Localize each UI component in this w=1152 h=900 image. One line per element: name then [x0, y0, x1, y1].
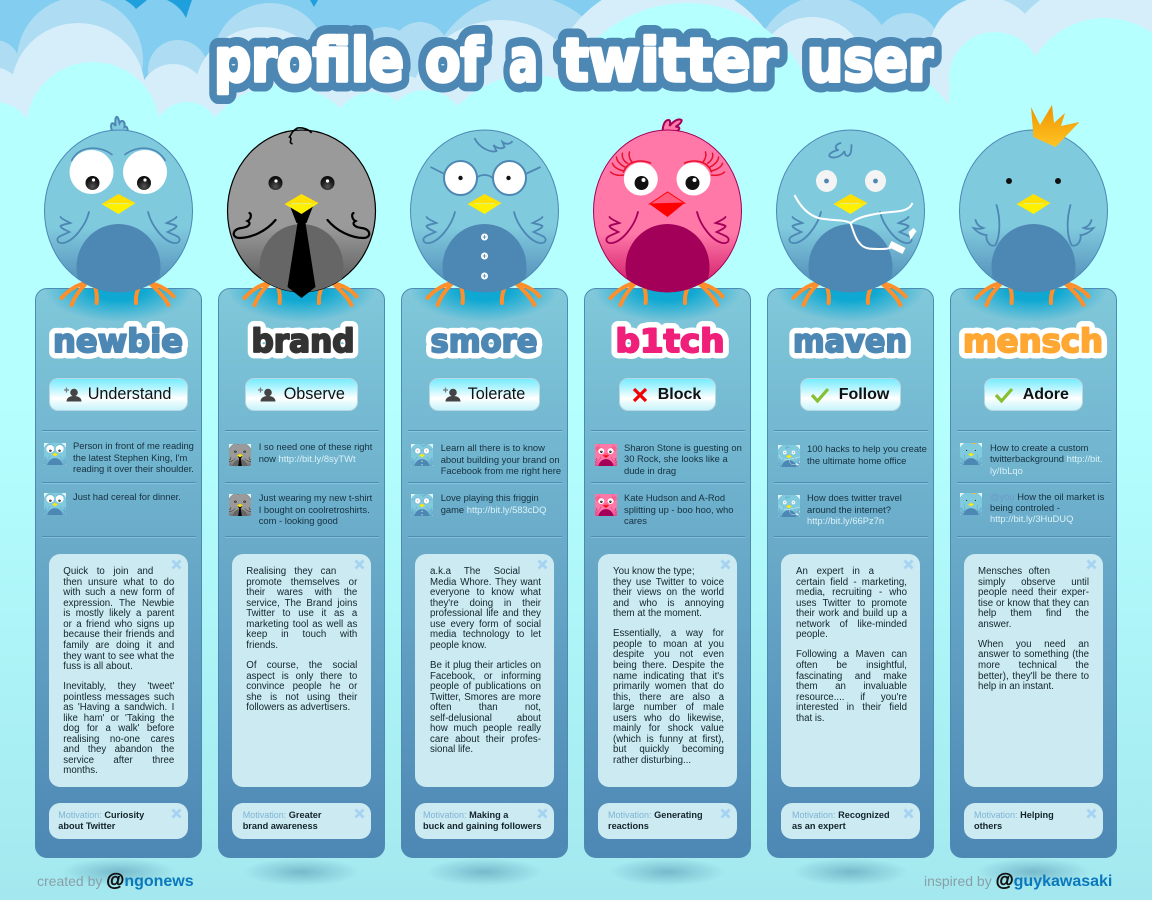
tweet text: I so need one of these right — [259, 441, 372, 452]
description text: media technology to let — [430, 629, 541, 640]
description text: Following a Maven can — [796, 649, 907, 660]
tweet text: around the internet? — [807, 504, 891, 515]
description text — [63, 566, 174, 776]
description text: people know. — [430, 640, 487, 651]
motivation box — [598, 803, 737, 839]
description text: Facebook, or informing — [430, 670, 541, 682]
heading: b1tch: b1tch — [616, 322, 724, 360]
heading: mensch: mensch — [963, 322, 1103, 360]
tweet text: reading it over their shoulder. — [73, 463, 194, 474]
description text: despite you not even — [613, 649, 724, 660]
description text: like ham' or 'Taking the — [63, 713, 174, 724]
description text: with such a new form of — [63, 587, 174, 598]
tweet avatar — [778, 495, 800, 517]
description text: care about their profes- — [430, 734, 541, 745]
description text: Media Whore. They want — [430, 577, 541, 588]
motivation text: reactions — [608, 820, 649, 830]
motivation text — [608, 810, 703, 832]
motivation text: Motivation: Curiosity — [58, 810, 144, 820]
description text: fuss is all about. — [63, 661, 133, 672]
tweet text — [624, 492, 733, 526]
button: observe: Observe — [284, 385, 345, 403]
description text: Of course, the social — [246, 660, 357, 671]
tweet text: splitting up - boo hoo, who — [624, 504, 733, 515]
close icon — [1086, 808, 1096, 818]
tweet avatar — [44, 493, 66, 515]
icon: pink bird — [593, 118, 742, 308]
description text: months. — [63, 765, 98, 776]
description text: interested in their field — [796, 702, 907, 713]
panel background — [584, 288, 751, 858]
description text: often be insightful, — [796, 660, 907, 671]
tweet text: Person in front of me reading — [73, 440, 194, 451]
heading: smore: smore — [430, 322, 538, 360]
description text: they want to see what the — [63, 651, 174, 662]
tweet text: the ultimate home office — [807, 455, 906, 466]
description text: use every form of social — [430, 619, 541, 630]
description text: often than not, — [430, 702, 541, 713]
description text: that is. — [796, 713, 825, 724]
description text: help in an instant. — [978, 681, 1054, 692]
tweet text: Just had cereal for dinner. — [73, 491, 181, 502]
button: follow — [800, 378, 901, 411]
close icon — [354, 560, 364, 570]
description text: this, there are also a — [613, 692, 724, 703]
description text: fascinating and make — [796, 670, 907, 682]
description text: Mensches often — [978, 566, 1050, 577]
panel shadow — [61, 858, 176, 886]
panel background — [401, 288, 568, 858]
button: observe — [245, 378, 358, 411]
panel: mensch — [950, 100, 1117, 885]
description text: them an invaluable — [796, 681, 907, 692]
tweet text: Facebook from me right here — [441, 465, 561, 476]
motivation box — [964, 803, 1103, 839]
description text: friends. — [246, 640, 278, 651]
description box — [781, 554, 920, 787]
description text: help them find the — [978, 608, 1089, 619]
description text: everyone to know what — [430, 587, 541, 598]
description text: their work and build up a — [796, 608, 907, 619]
description text: resource.... if you're — [796, 692, 907, 703]
motivation text — [243, 810, 322, 830]
motivation text: buck and gaining followers — [423, 820, 541, 830]
tweet avatar — [960, 493, 982, 515]
title: user — [807, 26, 933, 96]
motivation text: as an expert — [792, 820, 846, 830]
title: twitter — [562, 26, 778, 96]
button: understand — [49, 378, 188, 411]
panel shadow — [427, 858, 542, 886]
heading: newbie: newbie — [53, 322, 183, 360]
description box — [415, 554, 554, 787]
tweet text: http://bit.ly/66Pz7n — [807, 515, 884, 526]
panel shadow — [244, 858, 359, 886]
tweet avatar — [229, 444, 251, 466]
description text: mainly for shock value — [613, 723, 724, 734]
tweet text — [259, 441, 372, 464]
motivation text: others — [974, 820, 1002, 830]
description text: Be it plug their articles on — [430, 660, 541, 671]
description text: tise or know that they can — [978, 598, 1089, 609]
title: profile — [214, 26, 404, 96]
panel shadow — [976, 858, 1091, 886]
description text: convince people he or — [246, 681, 357, 692]
description box — [964, 554, 1103, 787]
tweet text: now http://bit.ly/8syTWt — [259, 453, 356, 464]
motivation box — [232, 803, 371, 839]
tweet text — [441, 492, 546, 515]
description text: people need their exper- — [978, 587, 1089, 598]
button: understand: Understand — [88, 385, 171, 403]
tweet text: cares — [624, 515, 647, 526]
close icon — [354, 808, 364, 818]
title: a — [509, 26, 538, 96]
description text: expression. The Newbie — [63, 598, 174, 609]
description text: them at the moment. — [613, 608, 702, 619]
description text: media, recruiting - who — [796, 587, 907, 598]
tweet text — [73, 440, 194, 474]
panel background — [35, 288, 202, 858]
panel shadow — [610, 858, 725, 886]
description text: dog for a walk' before — [63, 723, 174, 734]
tweet avatar — [411, 494, 433, 516]
tweet text: dude in drag — [624, 465, 676, 476]
description text — [246, 566, 358, 713]
tweet text: being controled - — [990, 502, 1060, 513]
description text: professional life and they — [430, 608, 541, 619]
icon: crowned bird — [950, 100, 1117, 310]
description text: uses Twitter to promote — [796, 598, 907, 609]
description text: is mostly likely a parent — [63, 608, 174, 619]
description text: name indicating that it's — [613, 670, 724, 682]
tweet text — [441, 442, 561, 476]
panel background — [767, 288, 934, 858]
description text: being there. Despite the — [613, 660, 724, 671]
description text: or a friend who signs up — [63, 619, 174, 630]
description text: Quick to join and — [63, 566, 153, 577]
description text: certain field - marketing, — [796, 577, 907, 588]
tweet text: ly/IbLqo — [990, 465, 1023, 476]
description text: simply observe until — [978, 577, 1089, 588]
description box — [232, 554, 371, 787]
description text: aspect is only there to — [246, 670, 357, 682]
close icon — [720, 558, 730, 570]
description text: people of publications on — [430, 681, 541, 692]
button: tolerate — [429, 378, 540, 411]
panel shadow — [793, 858, 908, 886]
description text: An expert in a — [796, 566, 874, 577]
description text: better), they'll be there to — [978, 670, 1089, 682]
motivation text — [792, 810, 890, 832]
description text: because their friends and — [63, 629, 174, 640]
tweet avatar — [595, 494, 617, 516]
description text: keep in touch with — [246, 629, 357, 640]
description text: sional life. — [430, 744, 473, 755]
panel: newbie — [35, 116, 202, 884]
tweet text — [259, 492, 372, 526]
title: of — [425, 26, 484, 96]
tweet text: Just wearing my new t-shirt — [259, 492, 372, 503]
tweet text: @you How the oil market is — [990, 491, 1104, 502]
description text: they use Twitter to voice — [613, 577, 724, 588]
motivation text — [423, 810, 542, 831]
description text: they're doing in their — [430, 598, 541, 609]
description text — [978, 567, 1089, 693]
description text: a.k.a The Social — [430, 566, 520, 577]
background clouds — [0, 0, 1152, 118]
description text: service, The Brand joins — [246, 598, 357, 609]
description text: then unsure what to do — [63, 577, 174, 588]
tweet text: Sharon Stone is guesting on — [624, 442, 742, 453]
button: block: Block — [658, 386, 701, 403]
tweet avatar — [411, 444, 433, 466]
icon: maven bird — [767, 100, 934, 310]
icon: newbie bird — [44, 116, 193, 308]
close icon — [538, 808, 548, 818]
description text: realising no-one cares — [63, 734, 174, 745]
tweet avatar — [229, 494, 251, 516]
description text: and who is annoying — [613, 598, 724, 609]
description text: people. — [796, 629, 828, 640]
tweet text: 30 Rock, she looks like a — [624, 453, 728, 464]
description text: but quickly becoming — [613, 744, 724, 755]
button: adore: Adore — [1023, 386, 1069, 403]
description text: primarily women that do — [613, 681, 724, 692]
motivation text: Motivation: Helping — [974, 810, 1054, 820]
close icon — [902, 558, 914, 570]
tweet avatar — [595, 444, 617, 466]
motivation box — [415, 803, 554, 839]
motivation box — [49, 803, 188, 839]
description text: When you need an — [978, 639, 1089, 650]
description text: their views on the world — [613, 587, 724, 598]
tweet text — [990, 442, 1103, 476]
credit: inspired by: inspired by @guykawasaki — [924, 869, 1112, 890]
description text: followers as advertisers. — [246, 702, 350, 713]
panel: smore — [401, 130, 568, 884]
tweet text — [624, 442, 742, 476]
description text: service after three — [63, 755, 174, 766]
tweet text: Love playing this friggin — [441, 492, 539, 503]
panel: brand — [218, 127, 385, 884]
motivation text: about Twitter — [58, 820, 115, 830]
tweet text: Kate Hudson and A-Rod — [624, 492, 725, 503]
close icon — [172, 560, 182, 570]
description text: network of like-minded — [796, 619, 907, 630]
credit: created by: created by @ngonews — [37, 869, 194, 890]
description text: pointless messages such — [63, 692, 174, 703]
description text: large number of male — [613, 702, 724, 713]
tweet text: http://bit.ly/3HuDUQ — [990, 513, 1073, 524]
close icon — [902, 808, 914, 818]
button: adore — [984, 378, 1083, 411]
motivation box — [781, 803, 920, 839]
heading: maven: maven — [793, 322, 907, 360]
description text: Twitter, Smores are more — [430, 692, 541, 703]
motivation text — [974, 810, 1054, 832]
panel: maven — [767, 100, 934, 885]
description text: as 'Having a sandwich. I — [63, 702, 174, 713]
motivation text: Motivation: Generating — [608, 810, 703, 820]
panel background — [950, 288, 1117, 858]
tweet text: the latest Stephen King, I'm — [73, 452, 187, 463]
tweet text: game http://bit.ly/583cDQ — [441, 504, 546, 515]
tweet avatar — [44, 443, 66, 465]
description box — [49, 554, 188, 787]
description text: Twitter to use it as a — [246, 608, 357, 619]
tweet text: Learn all there is to know — [441, 442, 545, 453]
motivation text: Motivation: Greater — [243, 810, 321, 820]
panel background — [218, 288, 385, 858]
button: tolerate: Tolerate — [468, 385, 525, 403]
description box — [598, 554, 737, 787]
description text: people to moan at you — [613, 639, 724, 650]
description text — [613, 567, 724, 766]
tweet text: How does twitter travel — [807, 492, 902, 503]
description text: family are doing it and — [63, 640, 174, 651]
description text: promote themselves or — [246, 577, 357, 588]
tweet avatar — [778, 445, 800, 467]
description text: how much people really — [430, 723, 541, 734]
heading: brand: brand — [252, 322, 354, 360]
motivation text: brand awareness — [243, 820, 318, 830]
description text: rather disturbing... — [613, 755, 691, 766]
tweet text: com - looking good — [259, 515, 338, 526]
description text: answer. — [978, 619, 1011, 630]
description text: she is not using their — [246, 692, 357, 703]
heading: maven — [767, 315, 934, 365]
description text: and they abandon the — [63, 744, 174, 755]
tweet text: 100 hacks to help you create — [807, 443, 927, 454]
description text: more technical the — [978, 660, 1089, 671]
tweet avatar — [960, 443, 982, 465]
close icon — [720, 808, 730, 818]
description text — [430, 566, 541, 755]
close icon — [172, 808, 182, 818]
tweet text — [990, 491, 1104, 525]
heading: mensch — [950, 315, 1117, 365]
description text: Essentially, a way for — [613, 628, 724, 639]
motivation text: Motivation: Recognized — [792, 810, 890, 820]
description text: marketing tool as well as — [246, 619, 357, 630]
panel: b1tch — [584, 118, 751, 884]
close icon — [538, 560, 548, 570]
close icon — [1086, 558, 1096, 570]
tweet text: I bought on coolretroshirts. — [259, 504, 370, 515]
description text: users who do likewise, — [613, 713, 724, 724]
description text: their wares with the — [246, 587, 357, 598]
description text: You know the type; — [613, 566, 695, 577]
title — [209, 25, 942, 104]
description text: answer to something (the — [978, 649, 1089, 660]
motivation text: Motivation: Making a — [423, 810, 508, 820]
tweet text: twitterbackground http://bit. — [990, 453, 1103, 464]
tweet text — [807, 492, 902, 526]
icon: smore bird — [410, 130, 559, 308]
tweet text: How to create a custom — [990, 442, 1088, 453]
tweet text — [807, 443, 927, 466]
description text: (which is funny at first), — [613, 734, 724, 745]
description text: Realising they can — [246, 566, 336, 577]
tweet text: about building your brand on — [441, 454, 560, 465]
motivation text — [58, 810, 144, 830]
button: follow: Follow — [839, 386, 889, 403]
description text: Inevitably, they 'tweet' — [63, 681, 174, 692]
icon: brand bird — [226, 127, 376, 308]
description text — [796, 567, 907, 724]
button: block — [619, 378, 716, 411]
description text: self-delusional about — [430, 713, 541, 724]
